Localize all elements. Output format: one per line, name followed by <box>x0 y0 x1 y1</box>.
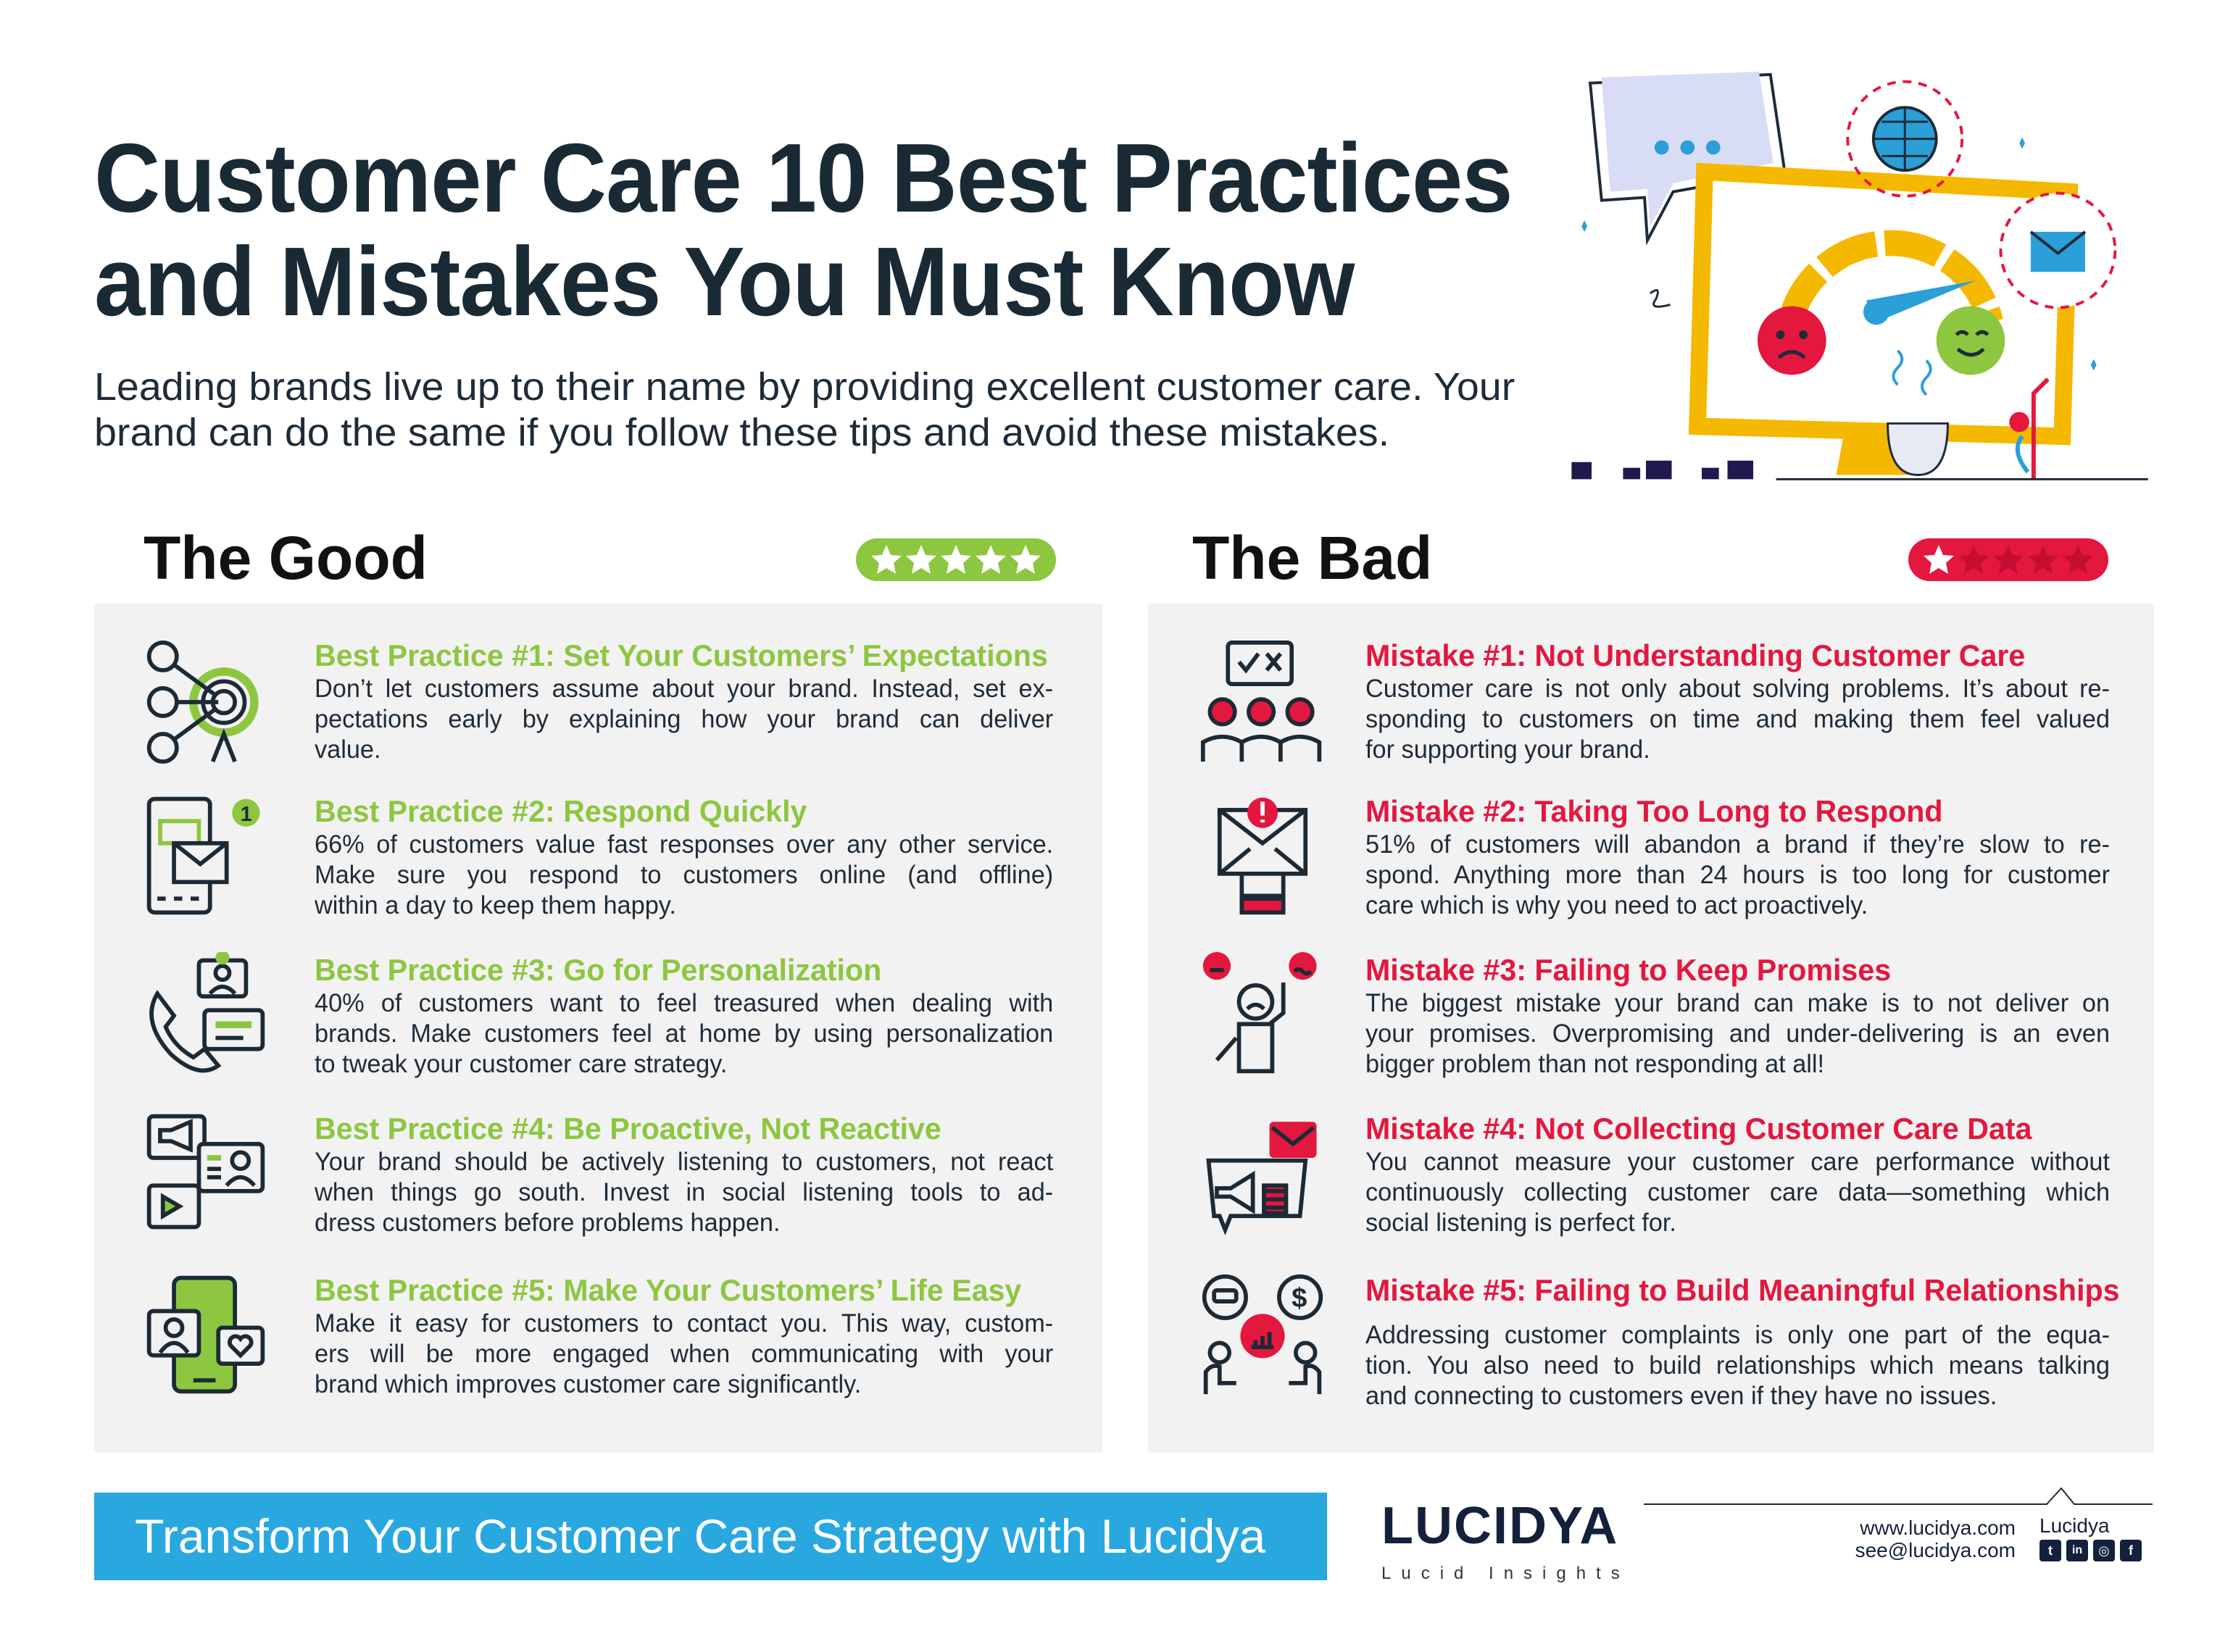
logo: Lucidya: LUCIDYA <box>1381 1497 1618 1555</box>
item: mistake 4: continuously collecting customer care data—something which <box>1365 1178 2110 1206</box>
item: best practice 1: Best Practice #1: Set Your Customers’ Expectations <box>315 638 1048 672</box>
item: mistake 4 <box>1365 1111 2110 1237</box>
item: best practice 1: Don’t let customers assume about your brand. Instead, set ex- <box>315 675 1053 703</box>
icon: relationship meeting <box>1202 1274 1323 1394</box>
icon: phone with video chat <box>146 1275 265 1394</box>
item: best practice 5: ers will be more engaged when communicating with your <box>315 1340 1053 1368</box>
icon: phone with messages: 1 <box>241 803 252 826</box>
rating: five green stars <box>856 538 1056 581</box>
item: mistake 2 <box>1365 794 2110 919</box>
item: mistake 5 <box>1365 1273 2120 1410</box>
item: best practice 4 <box>315 1111 1053 1237</box>
contact info: www.lucidya.com <box>1860 1517 2016 1539</box>
icon: megaphone with envelope <box>1206 1122 1317 1235</box>
item: best practice 5 <box>315 1273 1053 1398</box>
item: mistake 5: Addressing customer complaints is only one part of the equa- <box>1365 1321 2110 1349</box>
contact info: see@lucidya.com <box>1855 1539 2016 1561</box>
item: best practice 3: Best Practice #3: Go for Personalization <box>315 953 881 987</box>
item: mistake 3: bigger problem than not responding at all! <box>1365 1050 1824 1078</box>
social icons: ◎ <box>2098 1543 2110 1558</box>
item: best practice 3: brands. Make customers feel at home by using personalization <box>315 1019 1053 1048</box>
footer divider line with peak <box>1644 1487 2153 1505</box>
item: mistake 2: Mistake #2: Taking Too Long to Respond <box>1365 794 1943 828</box>
item: best practice 4: when things go south. Invest in social listening tools to ad- <box>315 1178 1053 1206</box>
footer banner: call to action: Transform Your Customer Care Strategy with Lucidya <box>135 1509 1265 1563</box>
item: best practice 1: value. <box>315 735 381 764</box>
item: mistake 4: Mistake #4: Not Collecting Customer Care Data <box>1365 1111 2032 1146</box>
icon: confused team <box>1200 641 1322 762</box>
item: best practice 3 <box>315 953 1053 1078</box>
item: best practice 4: Best Practice #4: Be Proactive, Not Reactive <box>315 1111 941 1146</box>
item: mistake 5: Mistake #5: Failing to Build Meaningful Relationships <box>1365 1273 2120 1307</box>
item: best practice 3: 40% of customers want to feel treasured when dealing with <box>315 989 1053 1017</box>
item: best practice 3: to tweak your customer care strategy. <box>315 1050 727 1078</box>
panel: the bad <box>1148 604 2154 1453</box>
title: Customer Care 10 Best Practices <box>94 123 1513 233</box>
item: mistake 3: Mistake #3: Failing to Keep Promises <box>1365 953 1891 987</box>
logo: Lucidya <box>1381 1497 1630 1583</box>
subtitle: Leading brands live up to their name by providing excellent customer care. Your <box>94 365 1515 409</box>
item: mistake 5: and connecting to customers even if they have no issues. <box>1365 1382 1997 1410</box>
icon: relationship meeting: $ <box>1292 1282 1307 1314</box>
panel: the good <box>94 604 1102 1453</box>
item: best practice 5: brand which improves customer care significantly. <box>315 1370 861 1398</box>
item: best practice 1: pectations early by explaining how your brand can deliver <box>315 705 1053 733</box>
item: mistake 3: your promises. Overpromising and under-delivering is an even <box>1365 1019 2110 1048</box>
item: mistake 3 <box>1365 953 2110 1078</box>
item: best practice 2: Make sure you respond to customers online (and offline) <box>315 861 1053 889</box>
contact info <box>1855 1517 2016 1561</box>
item: best practice 5: Make it easy for customers to contact you. This way, custom- <box>315 1309 1053 1338</box>
item: best practice 5: Best Practice #5: Make Your Customers’ Life Easy <box>315 1273 1021 1307</box>
icon: social listening <box>146 1114 265 1229</box>
social icons: Lucidya <box>2039 1514 2110 1537</box>
footer banner: call to action <box>94 1493 1327 1580</box>
item: mistake 5: tion. You also need to build relationships which means talking <box>1365 1351 2110 1380</box>
item: best practice 2: within a day to keep them happy. <box>315 891 676 919</box>
title <box>94 123 1513 336</box>
item: best practice 1 <box>315 638 1053 764</box>
rating: one red star <box>1908 538 2108 581</box>
illustration: customer care monitor <box>1571 72 2148 480</box>
social icons: f <box>2129 1543 2133 1558</box>
item: mistake 4: You cannot measure your customer care performance without <box>1365 1148 2110 1176</box>
heading: The Bad: The Bad <box>1192 524 1432 592</box>
subtitle: brand can do the same if you follow these tips and avoid these mistakes. <box>94 411 1389 454</box>
item: best practice 4: dress customers before problems happen. <box>315 1209 781 1237</box>
icon: phone with messages <box>146 797 260 914</box>
item: mistake 1: for supporting your brand. <box>1365 735 1650 764</box>
icon: phone call with chat <box>149 952 265 1072</box>
item: mistake 1: sponding to customers on time and making them feel valued <box>1365 705 2110 733</box>
item: mistake 1: Mistake #1: Not Understanding Customer Care <box>1365 638 2025 672</box>
item: best practice 2: 66% of customers value fast responses over any other service. <box>315 830 1053 859</box>
social icons: t <box>2048 1543 2053 1558</box>
item: mistake 2: care which is why you need to act proactively. <box>1365 891 1868 919</box>
icon: target with people <box>146 641 259 764</box>
item: mistake 2: spond. Anything more than 24 hours is too long for customer <box>1365 861 2110 889</box>
icon: urgent envelope <box>1218 797 1307 914</box>
social icons: in <box>2072 1544 2082 1556</box>
item: mistake 3: The biggest mistake your brand can make is to not deliver on <box>1365 989 2110 1017</box>
item: best practice 4: Your brand should be actively listening to customers, not react <box>315 1148 1053 1176</box>
item: mistake 1 <box>1365 638 2110 764</box>
item: mistake 4: social listening is perfect for. <box>1365 1209 1676 1237</box>
subtitle <box>94 365 1515 454</box>
item: mistake 2: 51% of customers will abandon a brand if they’re slow to re- <box>1365 830 2110 859</box>
logo: Lucidya: Lucid Insights <box>1381 1564 1630 1583</box>
item: mistake 1: Customer care is not only about solving problems. It’s about re- <box>1365 675 2110 703</box>
heading: The Good: The Good <box>144 524 428 592</box>
item: best practice 2: Best Practice #2: Respond Quickly <box>315 794 807 828</box>
icon: unhappy person <box>1203 952 1317 1074</box>
title: and Mistakes You Must Know <box>94 227 1354 336</box>
item: best practice 2 <box>315 794 1053 919</box>
social icons <box>2039 1514 2142 1561</box>
